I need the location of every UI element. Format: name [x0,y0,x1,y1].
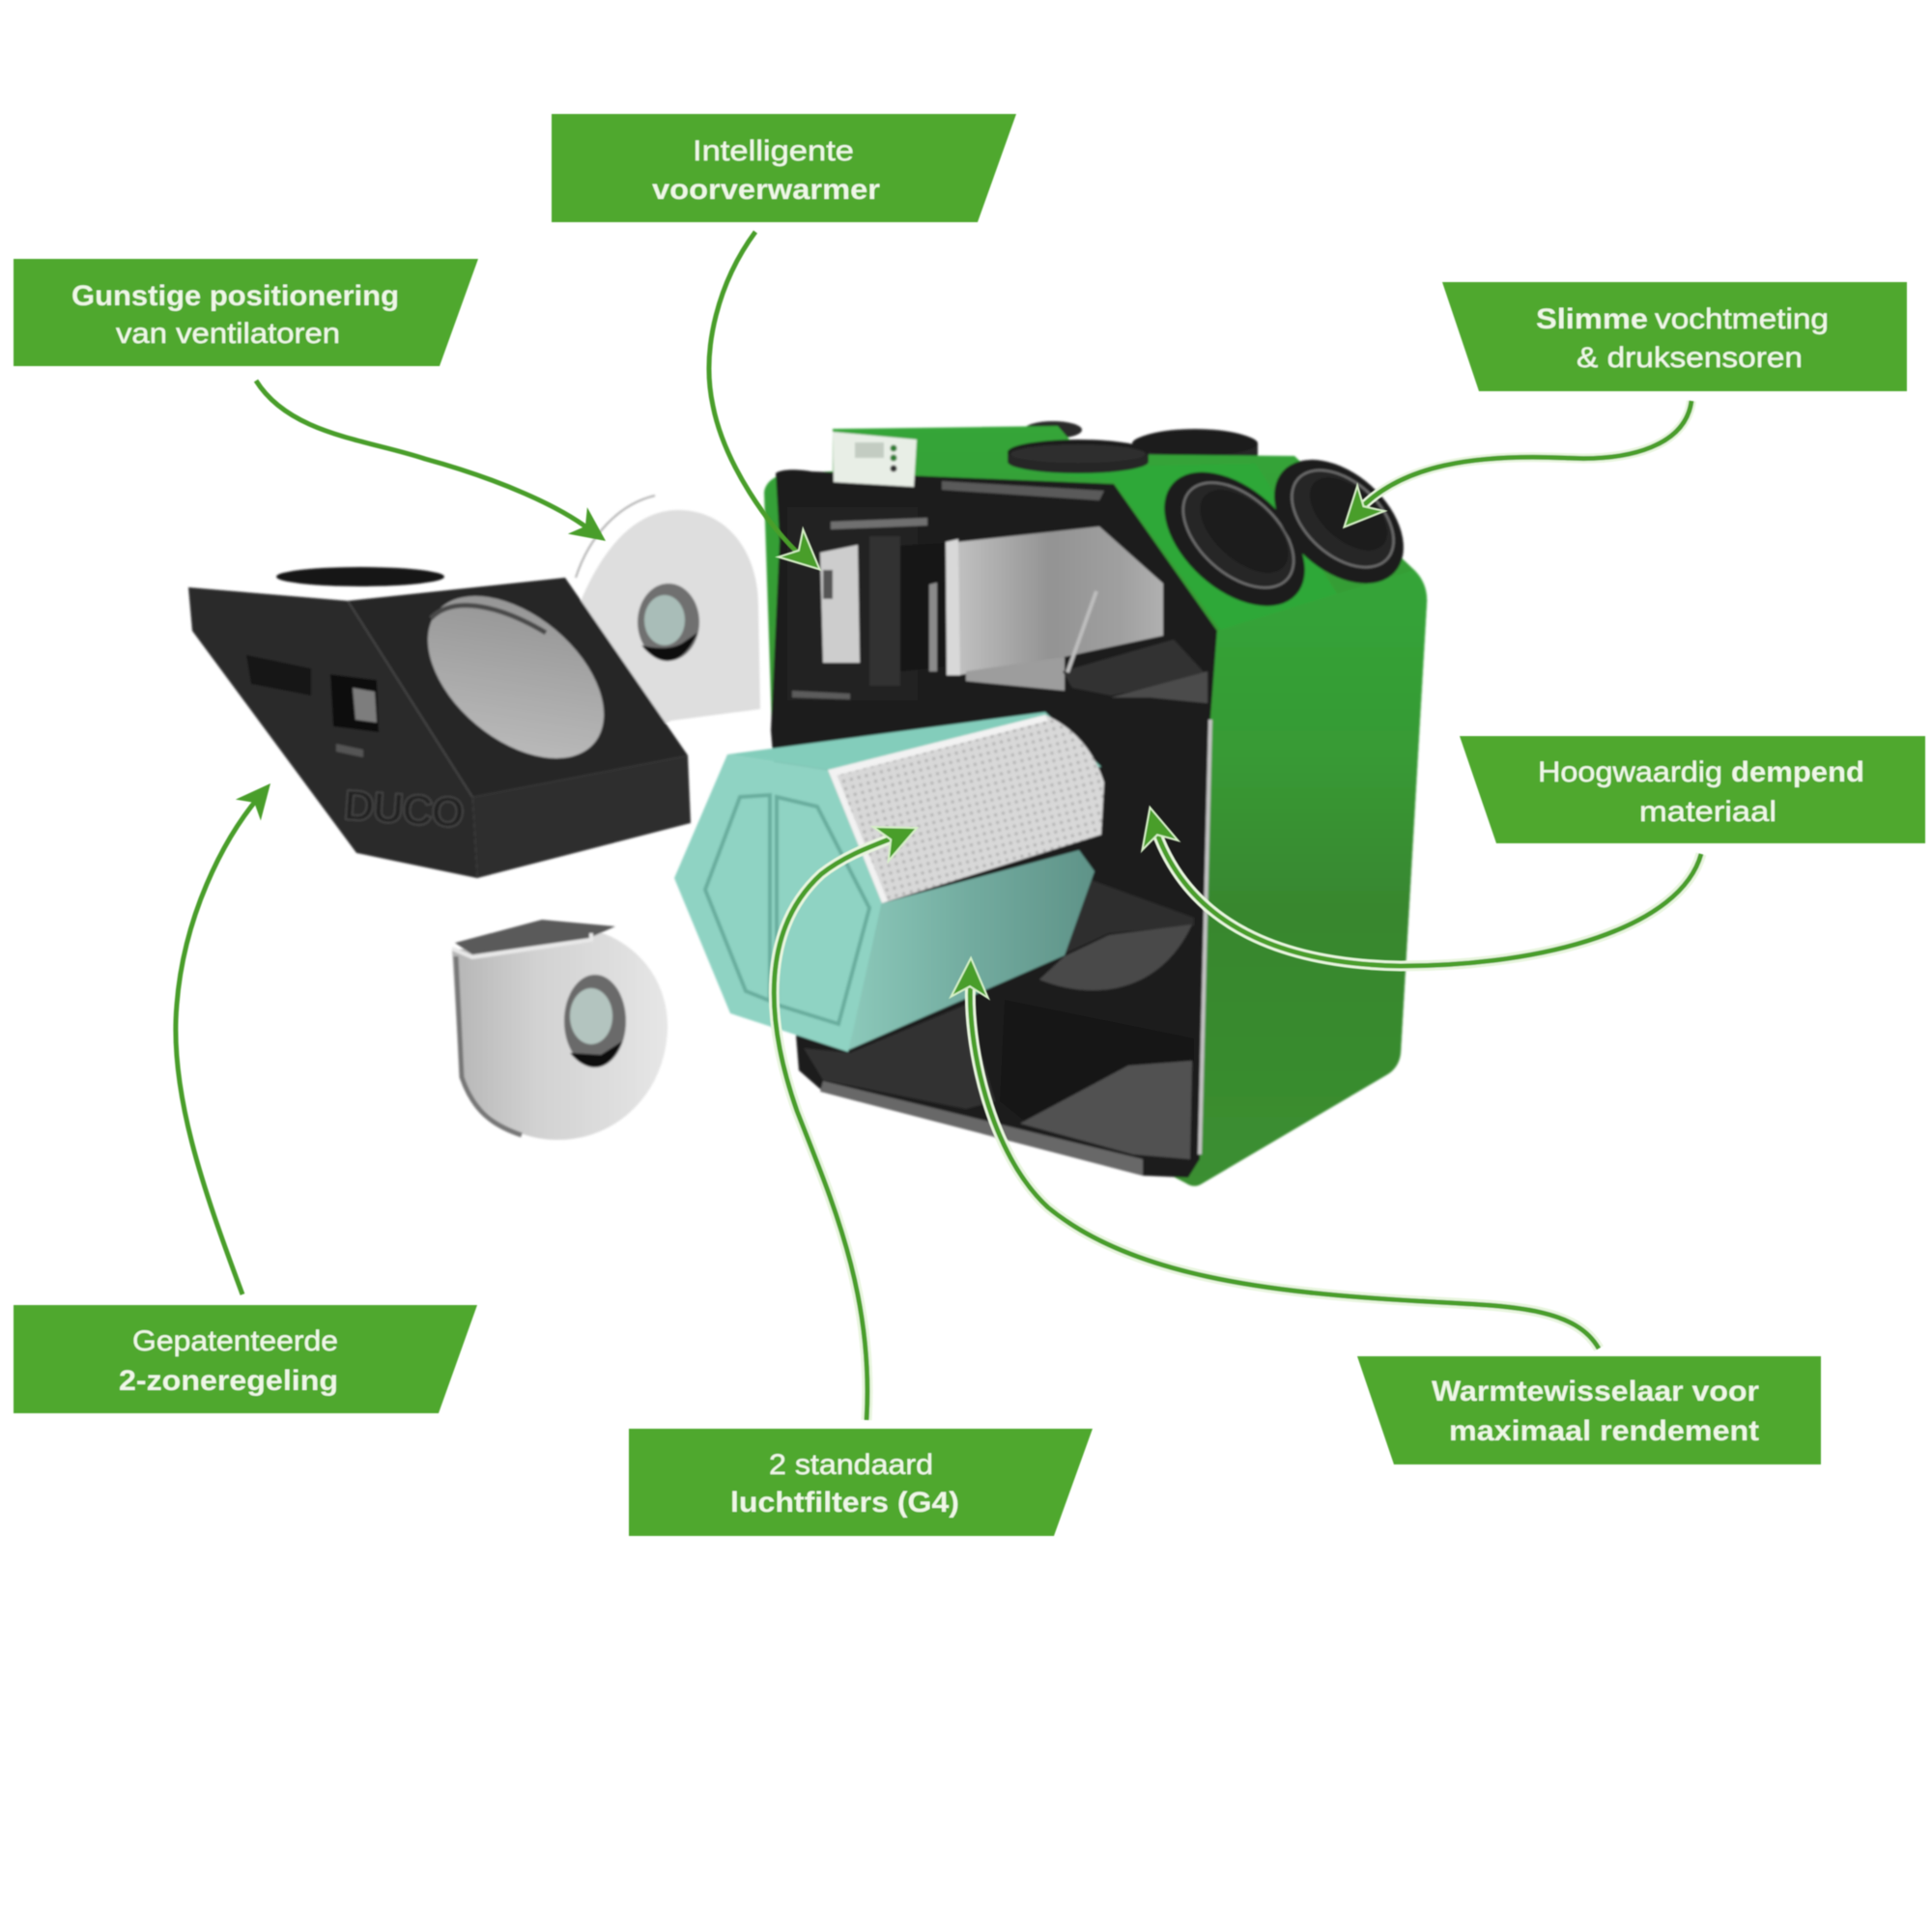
lower fan [452,920,668,1140]
back ducts [1024,421,1258,464]
banner: 2 standaard luchtfilters: 2 standaard [769,1449,933,1481]
banner: Hoogwaardig dempend materiaal: Hoogwaardig [1538,756,1722,788]
banner: Slimme vochtmeting en druksensoren: vochtmeting [1655,303,1829,335]
interior cavity [771,469,1217,1178]
banner: Intelligente voorverwarmer [552,114,1016,222]
banner: Gepatenteerde 2-zoneregeling: 2-zoneregeling [119,1365,338,1397]
banner: Gunstige positionering van ventilatoren [14,259,478,366]
curved arrows [176,232,1701,1420]
heat exchanger [674,712,1104,1052]
banner: Gunstige positionering van ventilatoren: van ventilatoren [116,318,340,350]
front large duct [1139,446,1330,632]
exploded product illustration [188,421,1427,1186]
arrow: heat exchanger [953,959,1599,1349]
callout banners [14,114,1925,1536]
banner: Gepatenteerde 2-zoneregeling [14,1305,477,1413]
banner: Intelligente voorverwarmer: Intelligente [693,135,854,167]
arrow: pre-heater [709,232,829,581]
banner: Slimme vochtmeting en druksensoren: & druksensoren [1577,342,1803,374]
banner: Hoogwaardig dempend materiaal: dempend [1731,756,1864,788]
right face [1200,570,1427,1184]
main ventilation unit [674,421,1427,1186]
rear large duct [1251,436,1427,608]
arrow: positioning of fans [256,381,615,554]
arrow: air filters [774,813,922,1420]
arrow: damping material [1135,806,1701,966]
control display [833,432,917,487]
banner: Gunstige positionering van ventilatoren: Gunstige positionering [71,280,399,312]
banner: Intelligente voorverwarmer: voorverwarmer [652,174,880,206]
banner: Slimme vochtmeting en druksensoren [1442,282,1907,391]
banner: 2 standaard luchtfilters: luchtfilters (G4) [730,1487,959,1519]
interior details lower [804,720,1210,1176]
green top strip [1005,464,1352,667]
black control housing: DUCO [342,781,466,838]
banner: Gepatenteerde 2-zoneregeling: Gepatenteerde [132,1325,338,1357]
upper fan [576,496,760,734]
banner: Warmtewisselaar voor maximaal rendement: maximaal rendement [1449,1415,1759,1447]
banner: 2 standaard luchtfilters [629,1429,1093,1536]
black control housing [188,564,691,878]
banner: Slimme vochtmeting en druksensoren: Slimme [1536,303,1648,335]
banner: Warmtewisselaar voor maximaal rendement [1357,1356,1821,1464]
green housing [764,426,1427,1186]
banner: Hoogwaardig dempend materiaal [1460,736,1925,843]
arrow: humidity and pressure sensors [1334,401,1691,537]
interior details upper [787,481,1208,703]
arrow: two-zone control [176,773,283,1294]
banner: Warmtewisselaar voor maximaal rendement: Warmtewisselaar voor [1432,1376,1759,1407]
top duct [1008,440,1149,473]
banner: Hoogwaardig dempend materiaal: materiaal [1639,796,1776,828]
